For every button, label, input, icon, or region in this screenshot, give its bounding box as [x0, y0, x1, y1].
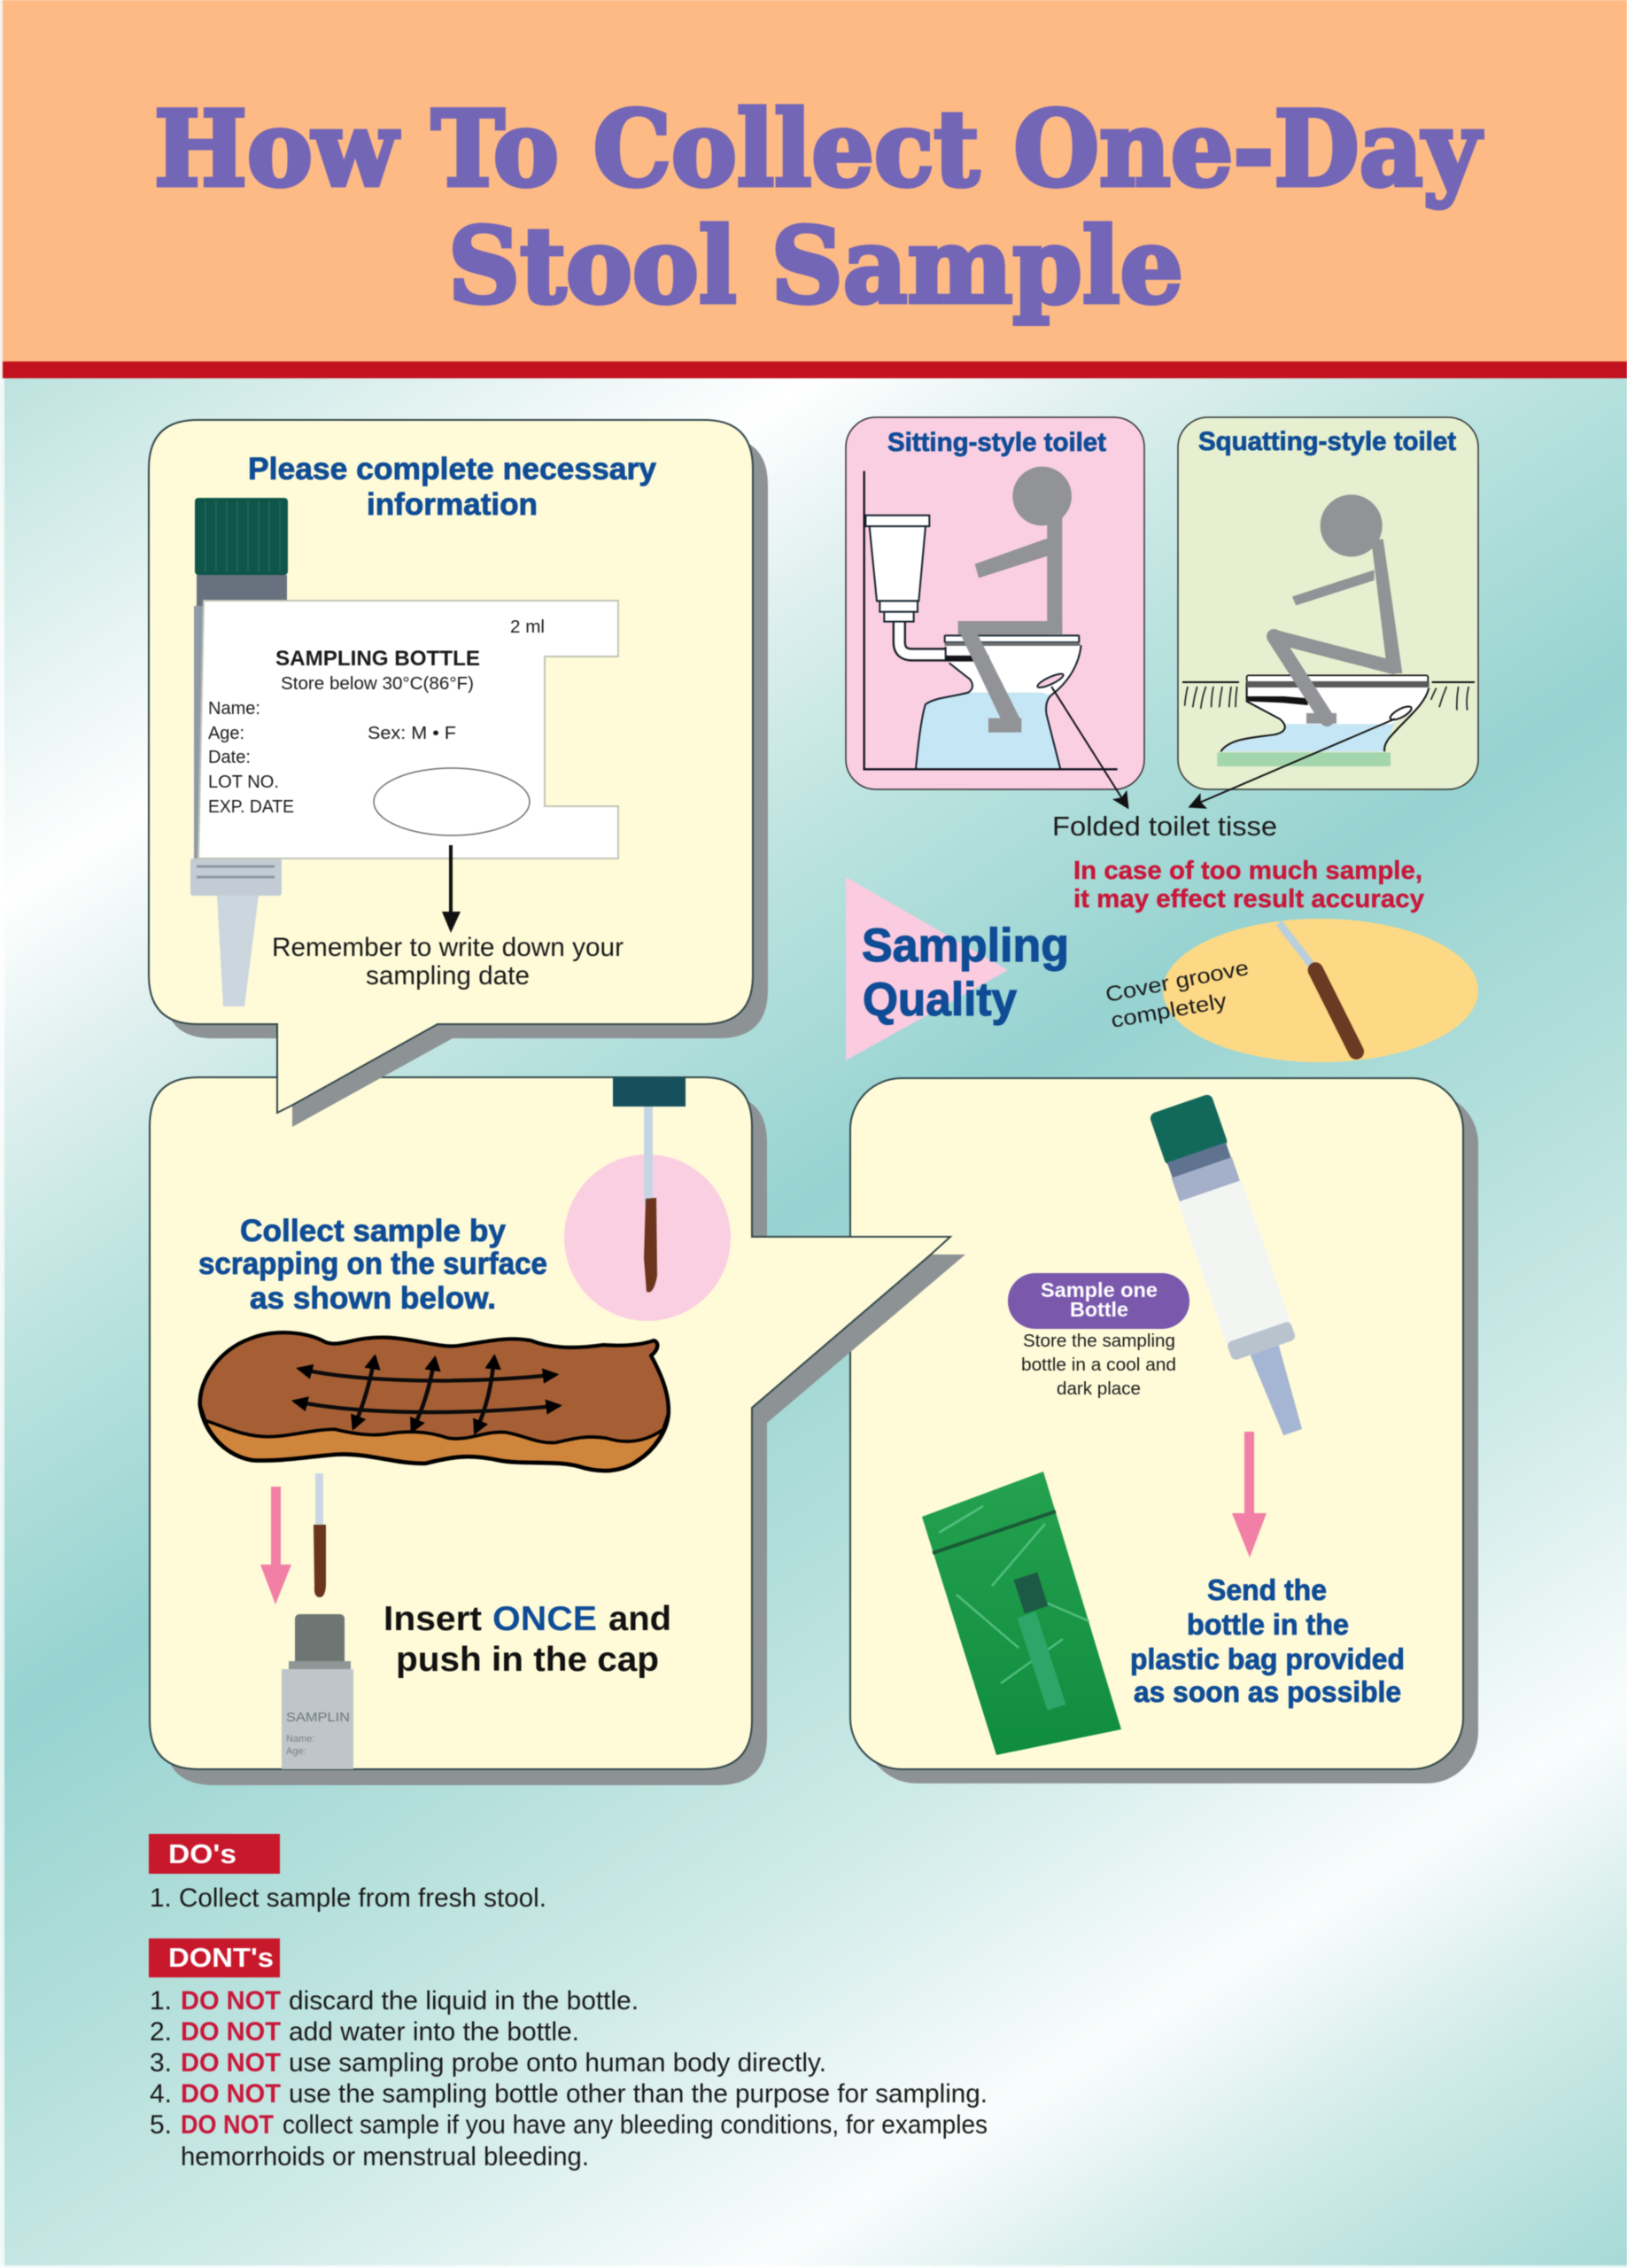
text: cover groove: completely	[1109, 989, 1228, 1033]
text: collect sample: scrapping on the surface	[198, 1247, 547, 1281]
section: dont's: DONT's	[168, 1942, 274, 1973]
list item 5: 5.	[150, 2110, 172, 2140]
section: do's: DO's	[168, 1838, 236, 1869]
arrow: to plastic bag	[1232, 1432, 1267, 1557]
text: sample warning: In case of too much sample,	[1073, 857, 1422, 885]
badge: sample one bottle: Sample one	[1041, 1278, 1158, 1301]
list item 3: use sampling probe onto human body directly.	[289, 2048, 826, 2078]
icon: sampling bottle tilted	[1148, 1093, 1325, 1443]
icon: open sampling bottle: SAMPLIN	[286, 1710, 350, 1725]
text: cover groove	[1104, 956, 1251, 1033]
label card: Name:	[208, 699, 260, 718]
list item 1: DO NOT	[181, 1986, 281, 2016]
badge: sample one bottle: Bottle	[1070, 1298, 1128, 1321]
panel: squatting-style toilet	[1178, 417, 1478, 789]
list item 3: DO NOT	[181, 2048, 281, 2078]
icon: pink triangle	[846, 877, 1008, 1060]
arrow: to sampling date	[442, 845, 461, 933]
label card: Age:	[208, 724, 244, 743]
text: send the bottle: as soon as possible	[1134, 1675, 1401, 1708]
text: sample warning: it may effect result accuracy	[1073, 885, 1424, 913]
label card: Store below 30°C(86°F)	[281, 674, 474, 694]
label card: Date:	[208, 748, 251, 767]
text: folded toilet tissue: Folded toilet tisse	[1052, 811, 1277, 842]
title	[154, 88, 1483, 327]
text: insert once: push in the cap	[396, 1641, 659, 1679]
text: send the bottle: Send the	[1207, 1573, 1327, 1606]
list item 5	[150, 2110, 988, 2171]
panel: send the bottle	[850, 1078, 1478, 1783]
text: collect sample	[198, 1214, 547, 1316]
panel: complete information	[149, 420, 768, 1127]
list item 2: 2.	[150, 2017, 172, 2047]
label card: 2 ml	[510, 617, 545, 637]
text: send the bottle	[1130, 1573, 1405, 1708]
text: insert once: Insert	[384, 1600, 482, 1638]
arrows: to folded tissue	[1051, 687, 1395, 808]
list item 5: collect sample if you have any bleeding conditions, for examples	[283, 2110, 988, 2140]
text: collect sample: Collect sample by	[240, 1214, 507, 1248]
title: How To Collect One-Day	[154, 88, 1483, 210]
list item 4: DO NOT	[181, 2079, 281, 2109]
icon: stool with scraping arrows	[200, 1332, 669, 1471]
heading: sitting-style toilet: Sitting-style toilet	[887, 428, 1106, 457]
illustration: sitting toilet	[864, 467, 1118, 769]
badge: sample one bottle	[1008, 1273, 1189, 1329]
text: storage note: dark place	[1057, 1379, 1141, 1399]
label card: Sex: M • F	[368, 724, 456, 743]
text: send the bottle: bottle in the	[1187, 1608, 1349, 1641]
label card: SAMPLING BOTTLE	[275, 647, 480, 671]
header band	[0, 0, 1627, 378]
icon: open sampling bottle: Name:	[286, 1734, 314, 1744]
heading: complete information: information	[367, 487, 538, 522]
list item 4: 4.	[150, 2079, 172, 2109]
label card: LOT NO.	[208, 773, 279, 792]
icon: cap with probe	[613, 1077, 686, 1293]
list item 5: DO NOT	[181, 2110, 274, 2140]
list item 5: hemorrhoids or menstrual bleeding.	[181, 2142, 589, 2171]
heading: complete information	[248, 452, 657, 522]
heading: complete information: Please complete necessary	[248, 452, 657, 486]
text: insert once	[384, 1600, 671, 1679]
icon: open sampling bottle	[282, 1614, 353, 1769]
text: remember date	[272, 933, 624, 990]
icon: green plastic bag	[922, 1472, 1121, 1755]
list item 2: DO NOT	[181, 2017, 281, 2047]
text: storage note: Store the sampling	[1023, 1332, 1175, 1351]
panel: sitting-style toilet	[846, 417, 1144, 789]
list item 3: 3.	[150, 2048, 172, 2078]
heading: sampling quality: Quality	[863, 974, 1018, 1026]
icon: pink circle	[564, 1154, 731, 1321]
heading: squatting-style toilet: Squatting-style toilet	[1198, 427, 1456, 456]
text: insert once: and	[608, 1600, 671, 1638]
text: cover groove: Cover groove	[1104, 956, 1251, 1007]
label card: EXP. DATE	[208, 797, 294, 817]
text: remember date: Remember to write down your	[272, 933, 624, 962]
list item 2: add water into the bottle.	[289, 2017, 579, 2047]
list item 4: use the sampling bottle other than the purpose for sampling.	[289, 2079, 988, 2109]
icon: green-capped bottle	[190, 498, 288, 1006]
icon: probe with sample	[314, 1473, 326, 1597]
text: insert once: ONCE	[492, 1600, 597, 1638]
panel: collect sample	[150, 1077, 965, 1785]
icon: probe groove covered	[1279, 923, 1356, 1052]
illustration: squatting toilet	[1182, 494, 1475, 766]
list item 2	[150, 2017, 579, 2047]
text: sample warning	[1073, 857, 1424, 913]
section: dont's	[149, 1938, 988, 2171]
list item 1: 1.	[150, 1986, 172, 2016]
label card	[198, 601, 618, 858]
text: send the bottle: plastic bag provided	[1130, 1643, 1405, 1675]
section: do's: 1. Collect sample from fresh stool.	[150, 1884, 546, 1913]
heading: sampling quality	[862, 920, 1069, 1026]
heading: sampling quality: Sampling	[862, 920, 1069, 972]
section: do's	[149, 1834, 546, 1913]
text: collect sample: as shown below.	[250, 1281, 496, 1316]
text: storage note: bottle in a cool and	[1021, 1355, 1176, 1375]
icon: open sampling bottle: Age:	[286, 1746, 306, 1757]
icon: yellow ellipse	[1163, 919, 1478, 1062]
arrow: pink down	[260, 1487, 291, 1604]
text: remember date: sampling date	[366, 961, 530, 990]
list item 1: discard the liquid in the bottle.	[289, 1986, 639, 2016]
text: storage note	[1021, 1332, 1176, 1399]
title: Stool Sample	[448, 205, 1183, 327]
